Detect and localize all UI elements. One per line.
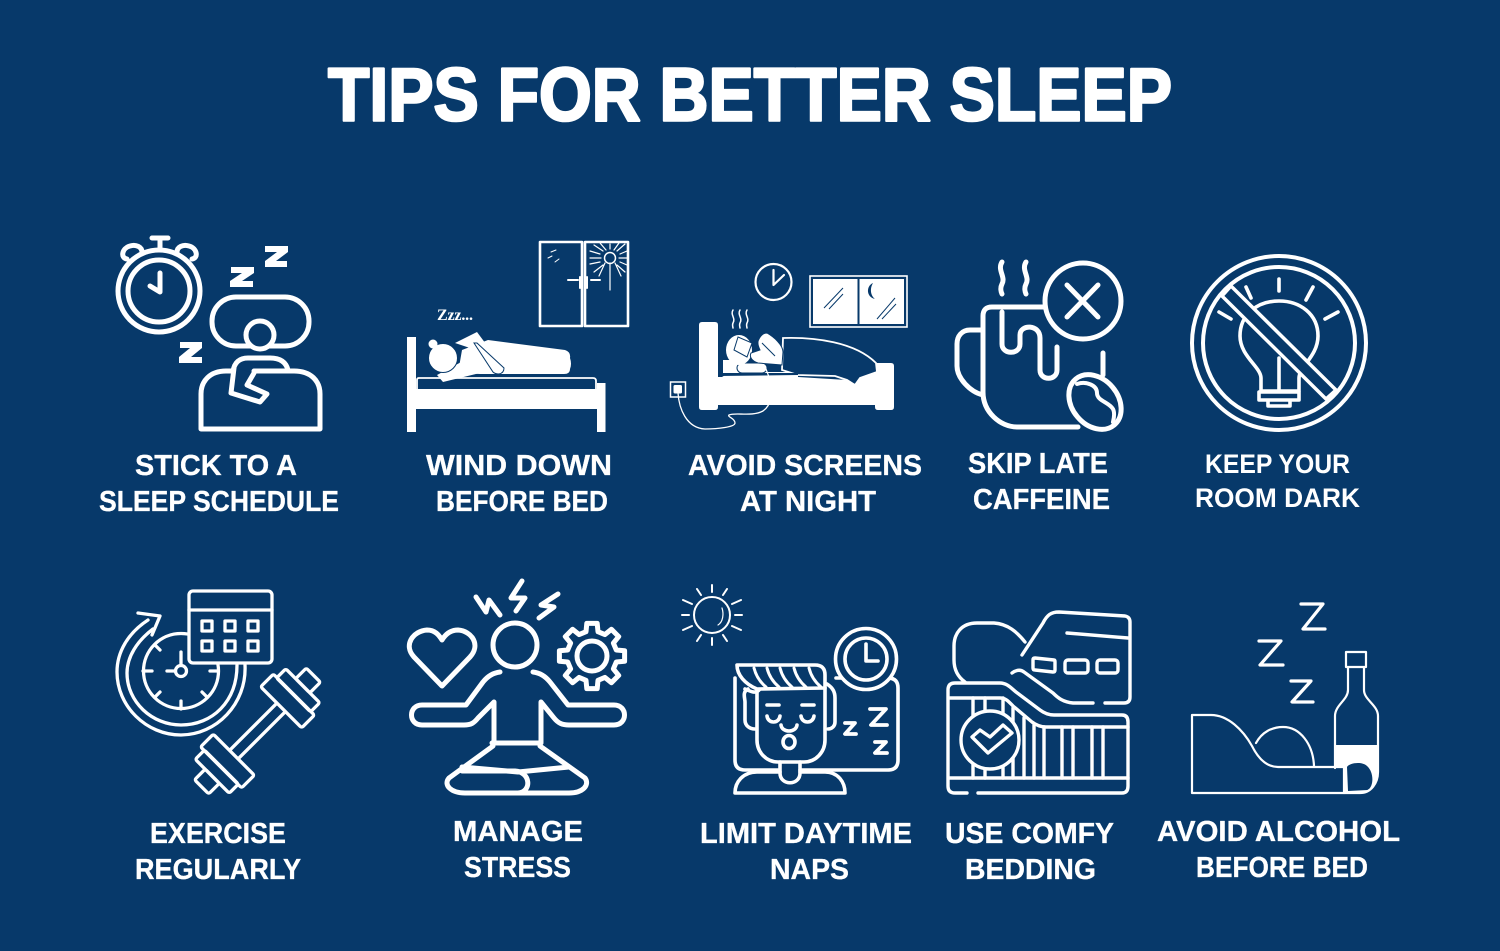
label: exercise regularly bbox=[135, 818, 301, 886]
label: manage stress: MANAGE bbox=[453, 816, 583, 848]
label: keep your room dark: KEEP YOUR bbox=[1205, 449, 1350, 479]
label: stick to a sleep schedule: SLEEP SCHEDULE bbox=[99, 486, 339, 518]
label: wind down before bed bbox=[426, 450, 612, 518]
floating z letters bbox=[1259, 604, 1325, 702]
icon: pillow, blanket and mattress bbox=[948, 612, 1130, 793]
circular arrow and clock bbox=[117, 613, 245, 735]
label: skip late caffeine: CAFFEINE bbox=[973, 484, 1110, 516]
label: stick to a sleep schedule: STICK TO A bbox=[135, 450, 297, 482]
label: avoid alcohol before bed bbox=[1157, 816, 1400, 884]
label: wind down before bed: BEFORE BED bbox=[436, 486, 608, 518]
label: use comfy bedding: BEDDING bbox=[965, 854, 1096, 886]
icon: person with phone in bed bbox=[670, 264, 907, 429]
icon: clock, calendar and dumbbell bbox=[117, 591, 334, 807]
bottle with liquid bbox=[1335, 652, 1378, 793]
panel: wind down before bed bbox=[407, 242, 628, 518]
title: TIPS FOR BETTER SLEEP bbox=[328, 52, 1172, 136]
label: stick to a sleep schedule bbox=[99, 450, 339, 518]
panel: skip late caffeine bbox=[957, 262, 1132, 516]
icon: person in bed with window bbox=[407, 242, 628, 432]
panel: limit daytime naps bbox=[682, 585, 912, 886]
man bbox=[735, 628, 898, 793]
icon: stopwatch, sleep mask and sleeper bbox=[118, 238, 320, 429]
icon: coffee mug with cross and bean bbox=[957, 262, 1132, 440]
label: exercise regularly: REGULARLY bbox=[135, 854, 301, 886]
icon: sleeper in bed with bottle bbox=[1192, 604, 1378, 793]
label: keep your room dark bbox=[1195, 449, 1360, 513]
panel: keep your room dark bbox=[1192, 256, 1366, 513]
icon: meditating person with heart and gear bbox=[409, 581, 625, 793]
person bbox=[726, 333, 783, 373]
label: avoid screens at night: AT NIGHT bbox=[740, 486, 876, 518]
icon: crossed-out light bulb bbox=[1192, 256, 1366, 430]
window with sun bbox=[540, 242, 628, 326]
label: avoid alcohol before bed: BEFORE BED bbox=[1196, 852, 1368, 884]
panel: exercise regularly bbox=[117, 591, 334, 886]
label: avoid screens at night: AVOID SCREENS bbox=[688, 450, 922, 482]
panel: manage stress bbox=[409, 581, 625, 884]
label: skip late caffeine bbox=[968, 448, 1110, 516]
label: limit daytime naps bbox=[700, 818, 912, 886]
bed and head bbox=[1192, 715, 1344, 793]
label: wind down before bed: WIND DOWN bbox=[426, 450, 612, 482]
label: keep your room dark: ROOM DARK bbox=[1195, 483, 1360, 513]
steam bbox=[732, 310, 748, 328]
label: avoid alcohol before bed: AVOID ALCOHOL bbox=[1157, 816, 1400, 848]
panel: use comfy bedding bbox=[945, 612, 1130, 886]
label: limit daytime naps: LIMIT DAYTIME bbox=[700, 818, 912, 850]
icon: sun, clock and napping man bbox=[682, 585, 898, 793]
label: use comfy bedding: USE COMFY bbox=[945, 818, 1114, 850]
dumbbell bbox=[181, 655, 334, 807]
blanket outline bbox=[782, 338, 877, 385]
sun bbox=[682, 585, 742, 645]
label: avoid screens at night bbox=[688, 450, 922, 518]
label: manage stress bbox=[453, 816, 583, 884]
panel: stick to a sleep schedule bbox=[99, 238, 339, 518]
bed and sleeper bbox=[407, 332, 606, 432]
label: use comfy bedding bbox=[945, 818, 1114, 886]
night window bbox=[810, 276, 907, 327]
panel: avoid alcohol before bed bbox=[1157, 604, 1400, 884]
bed bbox=[699, 322, 894, 410]
label: skip late caffeine: SKIP LATE bbox=[968, 448, 1108, 480]
wall clock bbox=[756, 264, 792, 300]
label: limit daytime naps: NAPS bbox=[770, 854, 849, 886]
charger cable and socket bbox=[670, 366, 772, 429]
label: manage stress: STRESS bbox=[464, 852, 571, 884]
label: exercise regularly: EXERCISE bbox=[150, 818, 286, 850]
zzz text: Zzz... bbox=[437, 307, 473, 324]
calendar bbox=[189, 591, 272, 663]
panel: avoid screens at night bbox=[670, 264, 922, 518]
